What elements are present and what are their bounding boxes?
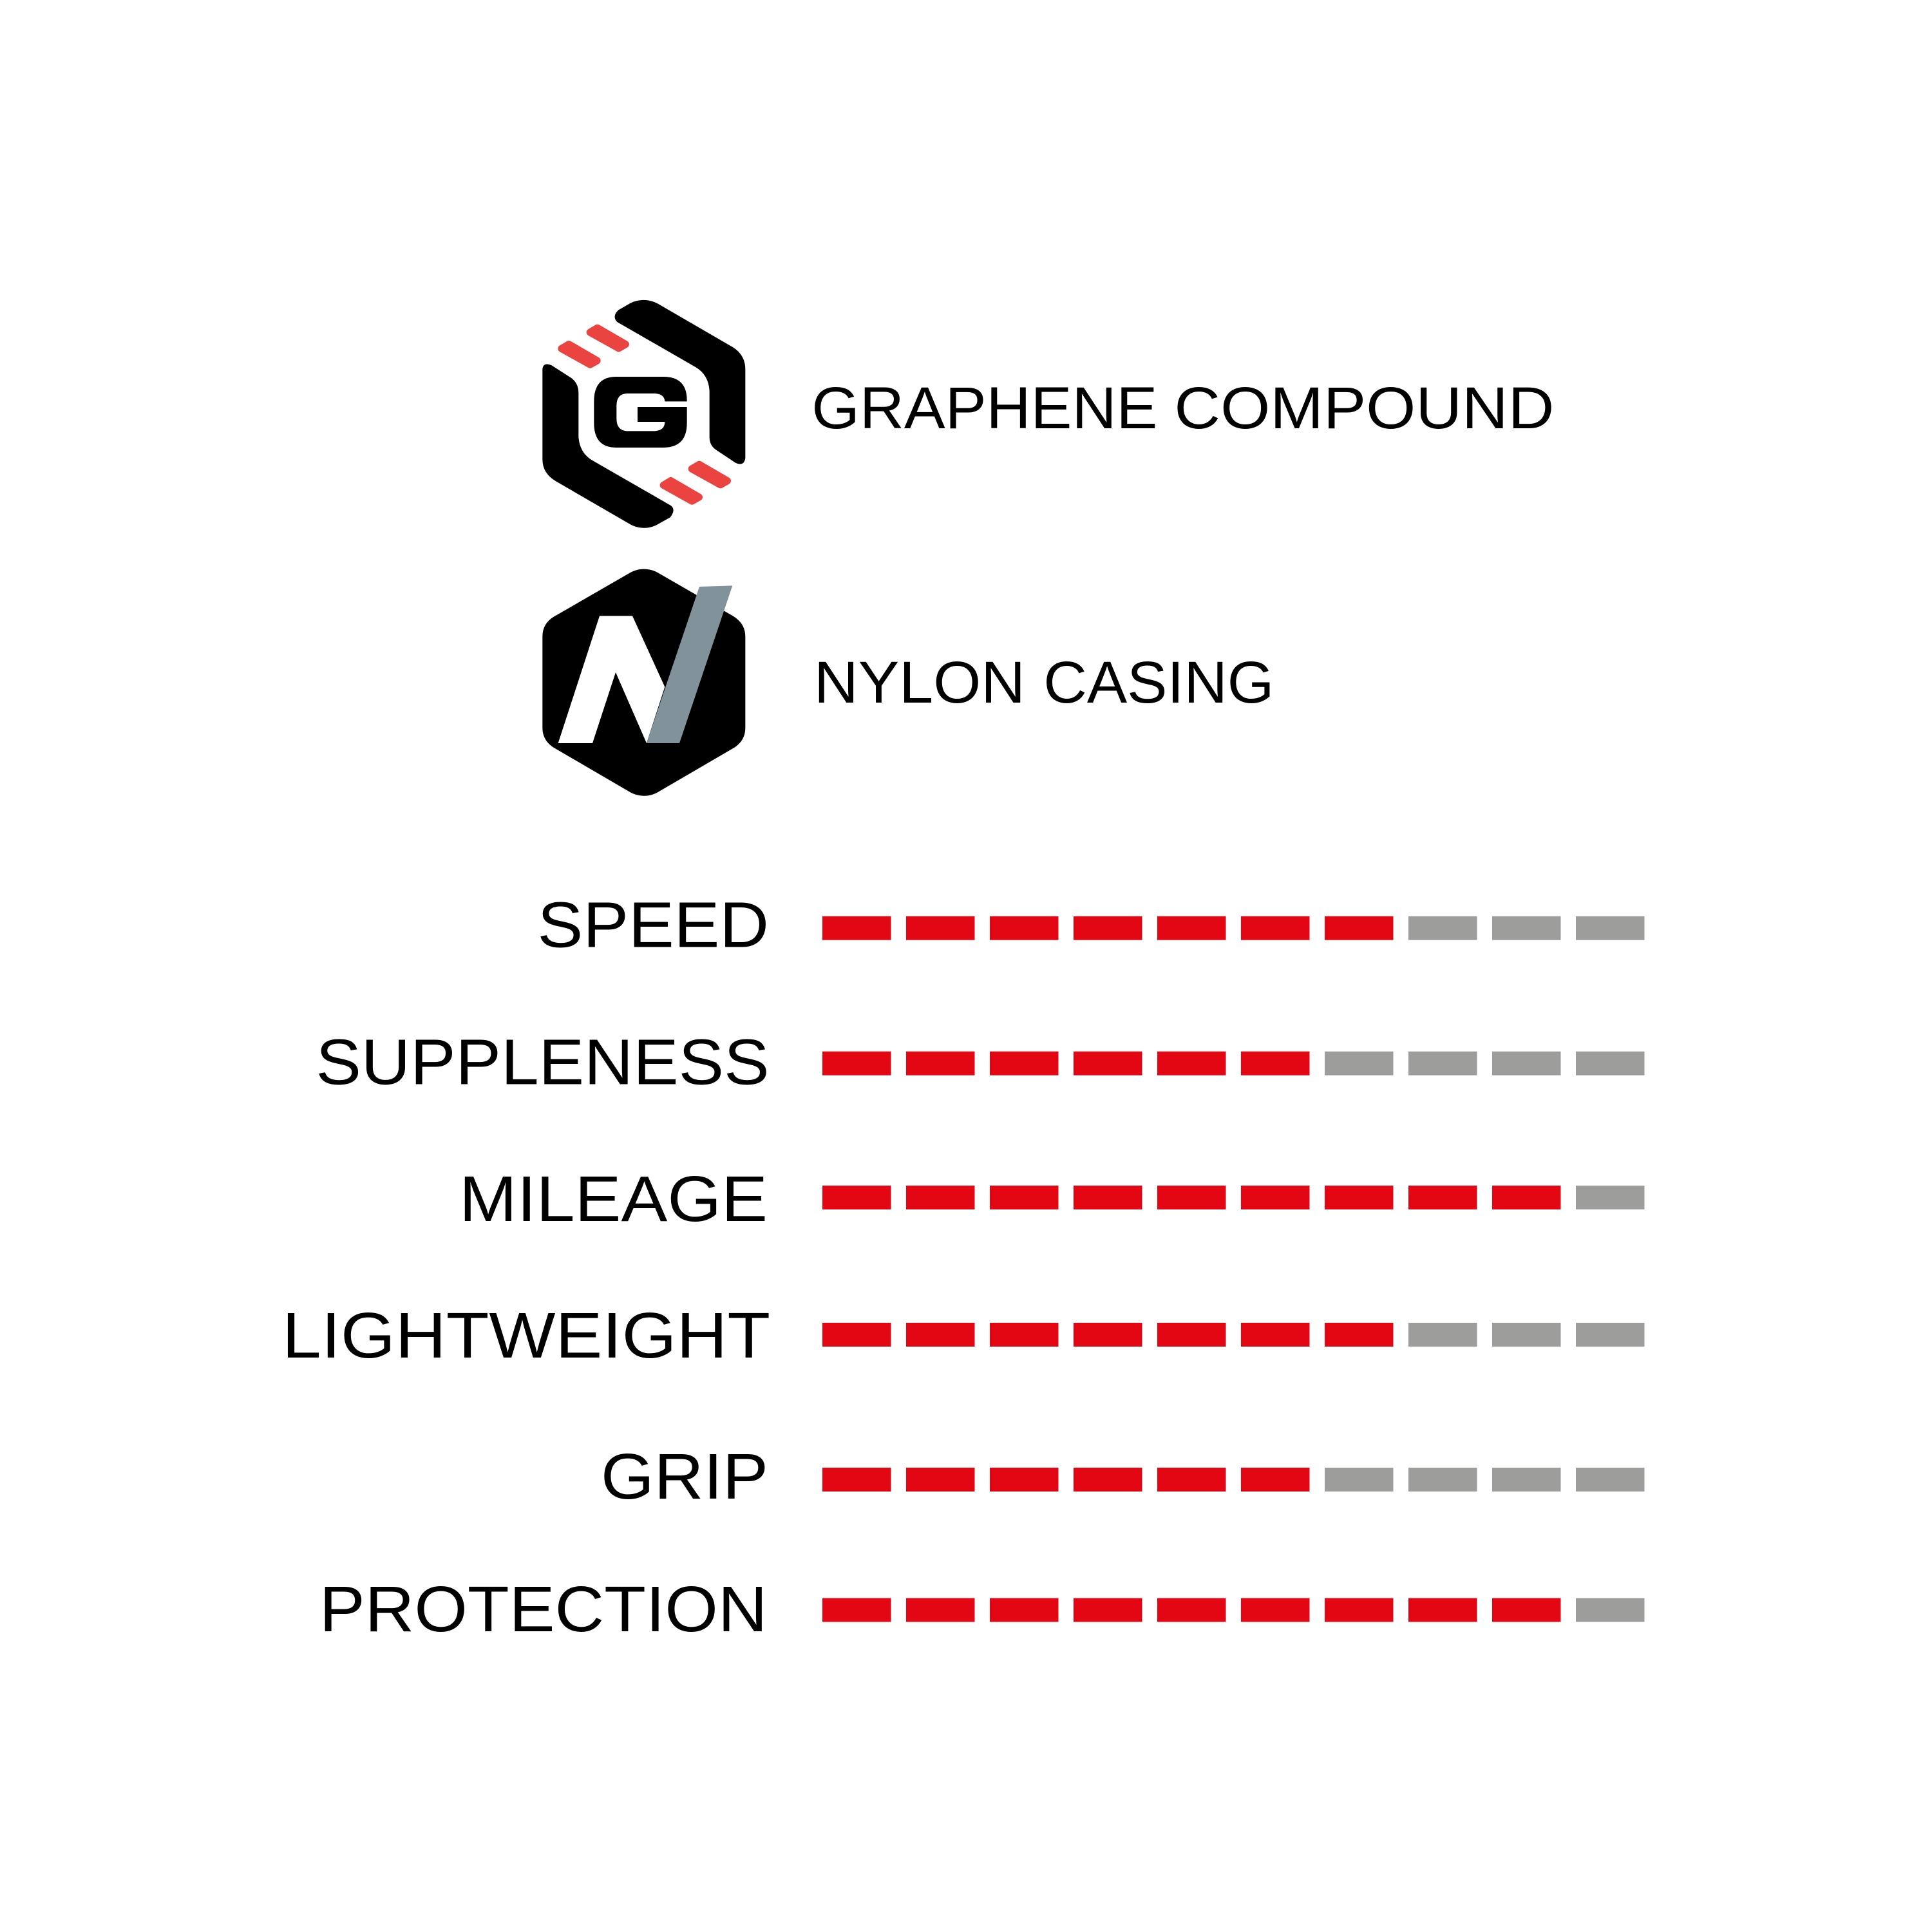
label: suppleness: SUPPLENESS (316, 1027, 769, 1099)
label: graphene compound: GRAPHENE (811, 375, 1157, 441)
label: grip: GRIP (601, 1441, 768, 1513)
rating row: grip (601, 1441, 1645, 1513)
label: nylon casing: CASING (1043, 650, 1274, 715)
label: protection: PROTECTION (319, 1573, 768, 1645)
rating bar: suppleness 6 of 10 (822, 1052, 1645, 1075)
rating row: lightweight (282, 1300, 1645, 1372)
rating bar: lightweight 7 of 10 (822, 1323, 1645, 1347)
rating bar: protection 9 of 10 (822, 1598, 1645, 1622)
label: mileage: MILEAGE (459, 1163, 768, 1235)
rating row: speed (537, 889, 1645, 961)
rating bar: mileage 9 of 10 (822, 1186, 1645, 1209)
label: graphene compound (811, 375, 1554, 441)
rating bar: speed 7 of 10 (822, 916, 1645, 940)
label: nylon casing: NYLON (814, 650, 1025, 715)
label: lightweight: LIGHTWEIGHT (282, 1300, 770, 1372)
icon: graphene compound hexagon G (542, 300, 745, 528)
rating row: suppleness (316, 1027, 1645, 1099)
rating row: mileage (459, 1163, 1645, 1235)
rating row: protection (319, 1573, 1645, 1645)
label: speed: SPEED (537, 889, 769, 961)
icon: nylon casing hexagon N (542, 569, 745, 796)
rating bar: grip 6 of 10 (822, 1468, 1645, 1492)
label: nylon casing (814, 650, 1274, 715)
label: graphene compound: COMPOUND (1174, 375, 1554, 441)
